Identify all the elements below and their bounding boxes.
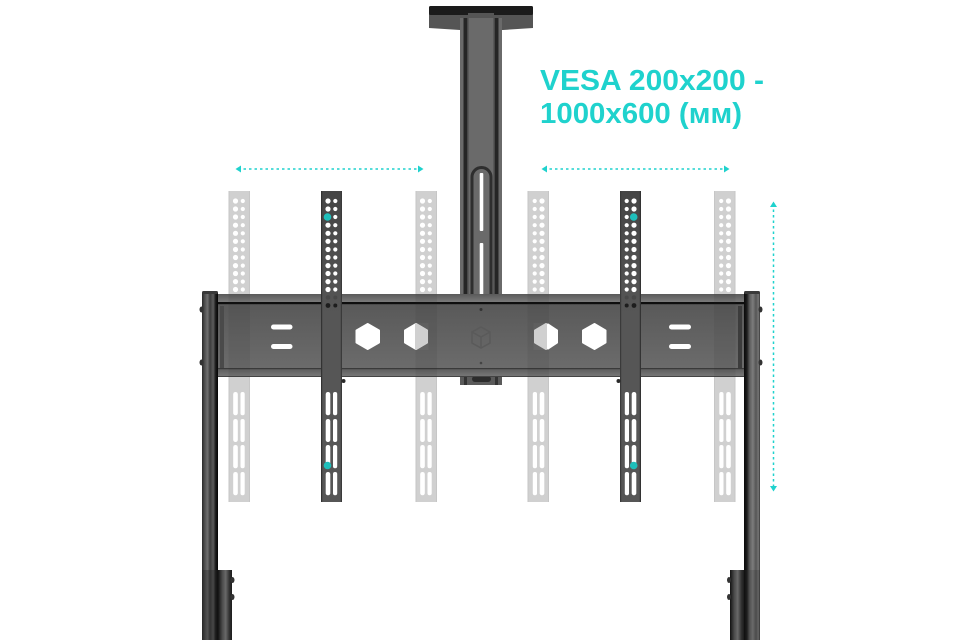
ceiling column (429, 6, 533, 385)
top flange (218, 294, 744, 302)
right active bracket (616, 191, 641, 502)
left active bracket (321, 191, 346, 502)
right-centre hexagon hole (535, 324, 557, 349)
left hexagon hole (356, 324, 379, 349)
arrow: left horizontal (236, 166, 424, 172)
right slots (669, 324, 691, 349)
teal marker bottom (324, 462, 331, 469)
left sleeve (218, 570, 232, 640)
arrow: vertical (770, 202, 777, 492)
right sleeve (730, 570, 744, 640)
right hexagon hole (583, 324, 606, 349)
right pole (727, 291, 762, 640)
mounting plate (218, 294, 744, 377)
column body (460, 18, 502, 295)
ghost shading over plate (228, 294, 736, 377)
title: VESA range: 1000x600 (мм) (540, 98, 742, 130)
left-centre hexagon hole (405, 324, 427, 349)
column slot (472, 168, 491, 295)
column lower end (460, 376, 502, 385)
arrow: right horizontal (542, 166, 730, 172)
top cap (429, 6, 533, 30)
teal marker top (324, 213, 331, 221)
left slots (271, 324, 292, 349)
ghost brackets behind plate (228, 191, 736, 502)
bottom flange (218, 368, 744, 377)
title: VESA range: VESA 200x200 - (540, 65, 764, 97)
centre logo (472, 327, 490, 348)
title: VESA range (540, 65, 764, 130)
teal marker top (630, 213, 638, 221)
teal marker bottom (630, 462, 638, 469)
left pole (200, 291, 234, 640)
